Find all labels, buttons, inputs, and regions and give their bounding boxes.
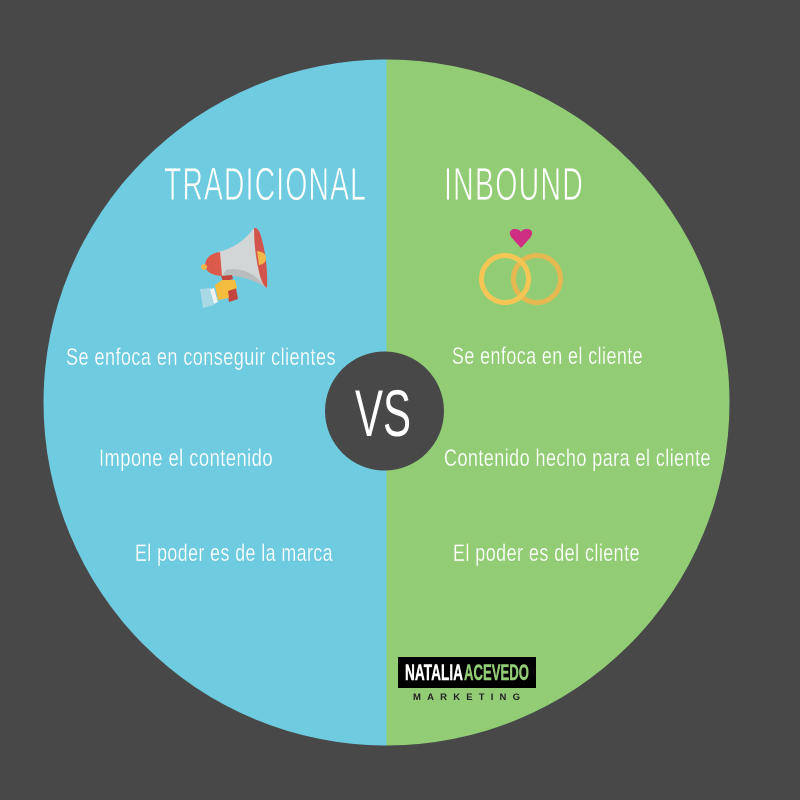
text: inbound point 1: Se enfoca en el cliente [452,343,643,370]
text: inbound point 3: El poder es del cliente [453,540,640,567]
text: tradicional point 1: Se enfoca en conseguir clientes [66,344,336,371]
text: tradicional point 3: El poder es de la marca [135,540,333,567]
logo: Natalia Acevedo Marketing: MARKETING [413,692,520,703]
logo: Natalia Acevedo Marketing [398,657,536,703]
logo: Natalia Acevedo Marketing: NATALIA [405,660,463,685]
badge: VS [325,352,444,470]
icon: megaphone [200,228,267,308]
heading: inbound: INBOUND [444,158,584,210]
heading: tradicional: TRADICIONAL [164,158,367,210]
icon: heart [510,229,532,248]
icon: wedding rings [482,256,560,302]
text: inbound point 2: Contenido hecho para el cliente [444,445,711,472]
panel: inbound half circle [386,60,730,746]
panel: tradicional half circle [44,60,386,746]
badge: VS: VS [355,376,411,450]
text: tradicional point 2: Impone el contenido [99,445,273,472]
logo: Natalia Acevedo Marketing: ACEVEDO [464,660,529,685]
